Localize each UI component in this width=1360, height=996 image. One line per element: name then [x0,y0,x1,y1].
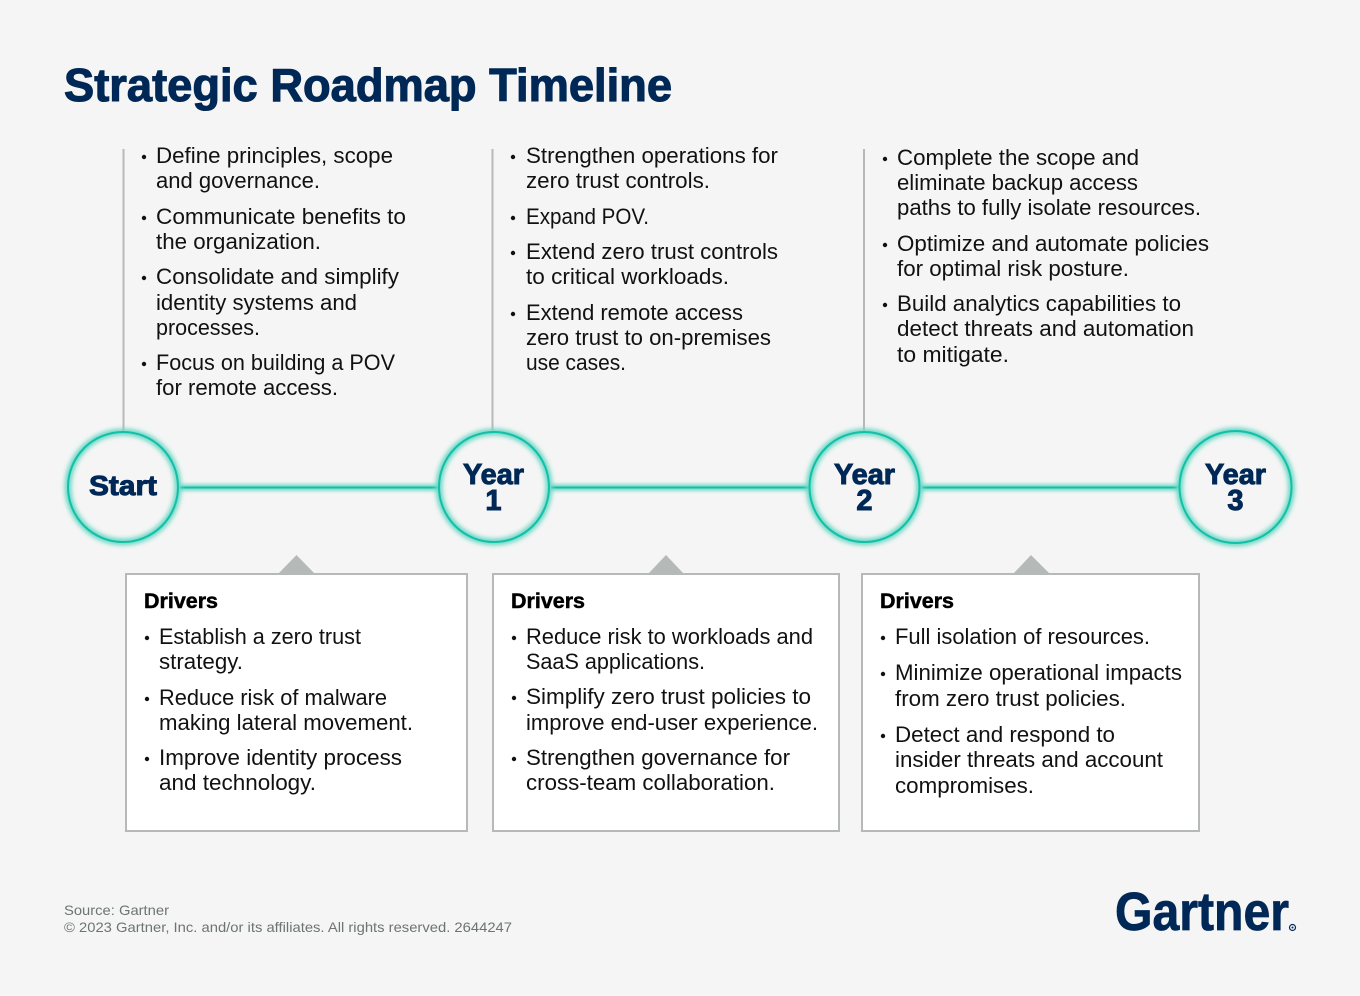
list: drivers: Simplify zero trust policies to [526,684,811,709]
list: start activities: Consolidate and simplify [156,264,399,289]
source and copyright: Source: Gartner [64,902,169,918]
source and copyright: © 2023 Gartner, Inc. and/or its affiliates. All rights reserved. 2644247 [64,919,512,935]
logo: Gartner: Gartner [1115,882,1289,942]
list: year 2 activities: eliminate backup access [897,170,1138,195]
milestone: year 3 [1180,431,1292,543]
heading: drivers: Drivers [144,590,218,613]
panel: year 1 activities [492,143,778,432]
list: year 2 activities: Optimize and automate policies [897,231,1209,256]
milestone: year 2: Year [834,459,895,491]
milestone: year 1: Year [463,459,524,491]
milestone: year 2 [810,432,920,542]
milestone: start [68,432,178,542]
list: year 1 activities: Extend zero trust controls [526,239,778,264]
panel: year 2 activities [864,145,1209,432]
list: drivers: Improve identity process [159,745,402,770]
list: drivers: Strengthen governance for [526,745,790,770]
list: start activities: processes. [156,315,260,340]
list: drivers: Reduce risk to workloads and [526,624,813,649]
milestone: year 3: 3 [1227,485,1244,517]
list: start activities: Focus on building a POV [156,350,395,375]
list: drivers [512,624,818,795]
list: year 2 activities: to mitigate. [897,342,1009,367]
list: start activities [142,143,406,400]
list: drivers [145,624,413,795]
list: drivers: SaaS applications. [526,649,705,674]
list: drivers: and technology. [159,770,316,795]
list: start activities: the organization. [156,229,321,254]
milestone: year 2: 2 [856,485,873,517]
list: drivers: cross-team collaboration. [526,770,775,795]
source and copyright [64,902,512,935]
list: drivers: compromises. [895,773,1034,798]
list: year 1 activities: Strengthen operations for [526,143,778,168]
list: drivers: strategy. [159,649,243,674]
list: year 1 activities: to critical workloads. [526,264,729,289]
milestone: year 1 [439,432,549,542]
list: year 1 activities: Expand POV. [526,204,649,229]
list: drivers [881,624,1182,798]
list: year 1 activities: use cases. [526,350,626,375]
list: year 1 activities [511,143,778,375]
panel: drivers year 2 to year 3 [862,555,1199,831]
heading: drivers: Drivers [880,590,954,613]
list: start activities: for remote access. [156,375,338,400]
list: drivers: Establish a zero trust [159,624,361,649]
list: year 2 activities: for optimal risk posture. [897,256,1129,281]
list: drivers: Reduce risk of malware [159,685,387,710]
heading: drivers: Drivers [511,590,585,613]
title: Strategic Roadmap Timeline [64,59,672,111]
milestone: start: Start [89,470,157,501]
list: drivers: improve end-user experience. [526,710,818,735]
panel: drivers year 1 to year 2 [493,555,839,831]
list: year 2 activities [883,145,1209,367]
list: year 2 activities: Build analytics capabilities to [897,291,1181,316]
milestone: year 1: 1 [485,485,502,517]
list: start activities: and governance. [156,168,320,193]
timeline connector lines [178,484,1182,491]
list: start activities: identity systems and [156,290,357,315]
list: drivers: Full isolation of resources. [895,624,1150,649]
panel: drivers start to year 1 [126,555,467,831]
list: year 2 activities: Complete the scope and [897,145,1139,170]
list: drivers: Minimize operational impacts [895,660,1182,685]
list: start activities: Define principles, scope [156,143,393,168]
panel: start activities [124,143,406,432]
milestone: year 3: Year [1205,459,1266,491]
list: year 2 activities: paths to fully isolate resources. [897,195,1201,220]
list: year 2 activities: detect threats and automation [897,316,1194,341]
list: drivers: making lateral movement. [159,710,413,735]
list: year 1 activities: zero trust to on-premises [526,325,771,350]
list: year 1 activities: zero trust controls. [526,168,710,193]
list: start activities: Communicate benefits to [156,204,406,229]
list: drivers: from zero trust policies. [895,686,1126,711]
list: drivers: Detect and respond to [895,722,1115,747]
list: year 1 activities: Extend remote access [526,300,743,325]
list: drivers: insider threats and account [895,747,1163,772]
